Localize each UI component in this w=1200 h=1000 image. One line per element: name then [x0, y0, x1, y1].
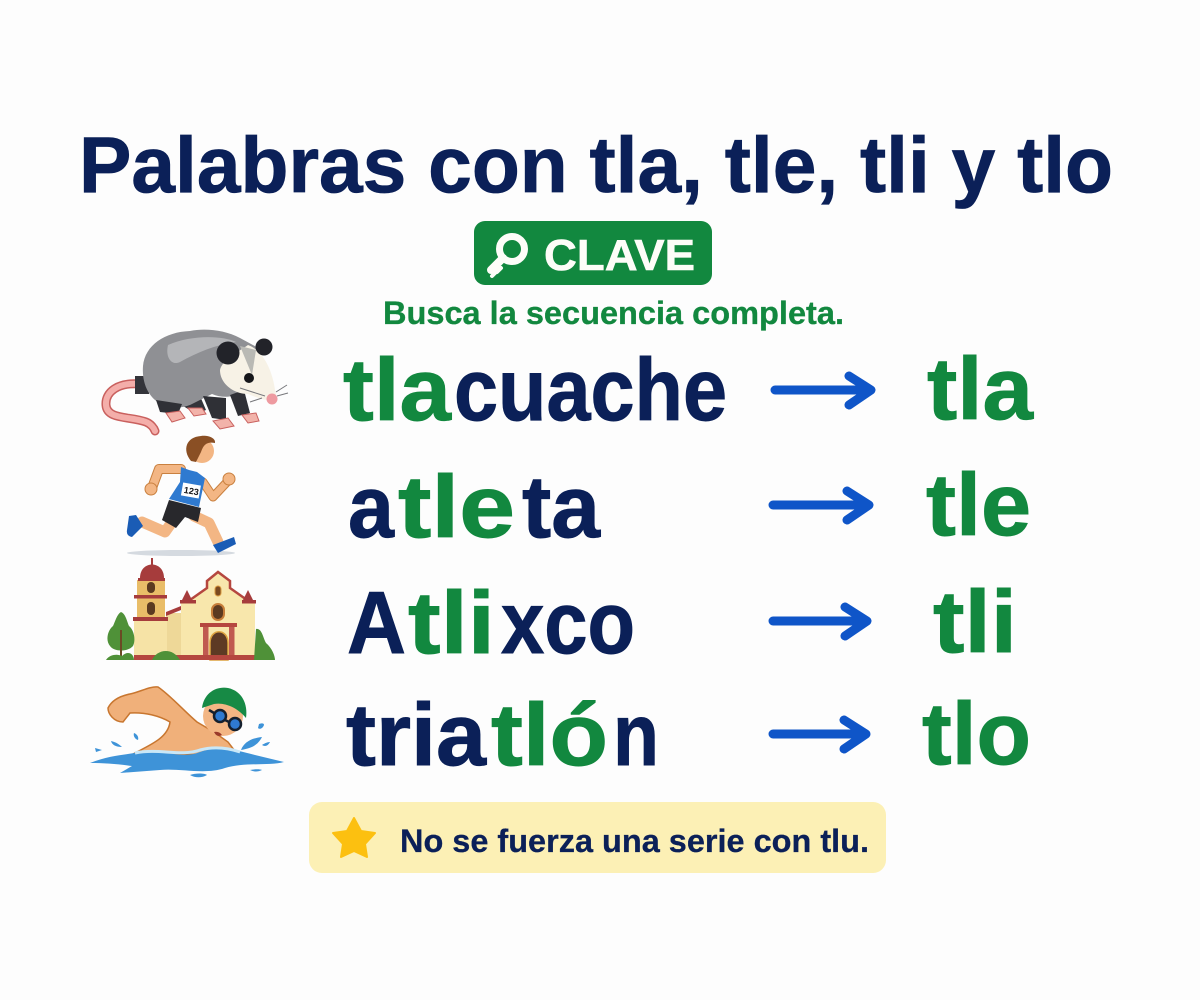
- word: tlacuache: cuache: [454, 340, 727, 439]
- word: triatlón: tló: [491, 685, 608, 784]
- icon: atleta: 123: [183, 485, 200, 497]
- icon: tlacuache: [106, 330, 288, 431]
- arrow 4: [773, 720, 866, 749]
- trees: [107, 612, 134, 650]
- title: Palabras con tla, tle, tli y tlo: [79, 120, 1113, 209]
- word: triatlón: [346, 685, 659, 784]
- answer: tle: tle: [926, 455, 1031, 554]
- icon: key: [491, 236, 524, 276]
- word: triatlón: tria: [346, 685, 487, 784]
- word: atleta: tle: [398, 457, 515, 556]
- icon: iglesia de Atlixco: [106, 558, 275, 660]
- icon: nadador: [90, 687, 284, 777]
- word: atleta: ta: [522, 457, 601, 556]
- answer: tla: tla: [927, 339, 1034, 438]
- subtitle: Busca la secuencia completa.: [383, 295, 844, 331]
- tower: [137, 580, 165, 618]
- nave: [166, 613, 182, 660]
- arrow 2: [773, 491, 869, 520]
- facade: [181, 573, 255, 660]
- word: Atlixco: [347, 573, 635, 672]
- answer: tli: tli: [933, 572, 1017, 671]
- answer: tlo: tlo: [922, 684, 1031, 783]
- arrow 1: [775, 376, 871, 405]
- word: Atlixco: xco: [501, 573, 635, 672]
- badge: clave: [474, 221, 712, 285]
- word: atleta: a: [348, 457, 395, 556]
- icon: star: [333, 818, 375, 857]
- icon: atleta: [127, 436, 236, 556]
- word: tlacuache: tla: [343, 340, 452, 439]
- callout: nota: No se fuerza una serie con tlu.: [400, 823, 869, 859]
- badge: clave: CLAVE: [544, 231, 695, 280]
- callout: nota: [309, 802, 886, 873]
- word: Atlixco: A: [347, 573, 406, 672]
- word: Atlixco: tli: [408, 573, 495, 672]
- arrow 3: [773, 607, 867, 636]
- word: triatlón: n: [613, 685, 659, 784]
- word: atleta: [348, 457, 601, 556]
- word: tlacuache: [343, 340, 727, 439]
